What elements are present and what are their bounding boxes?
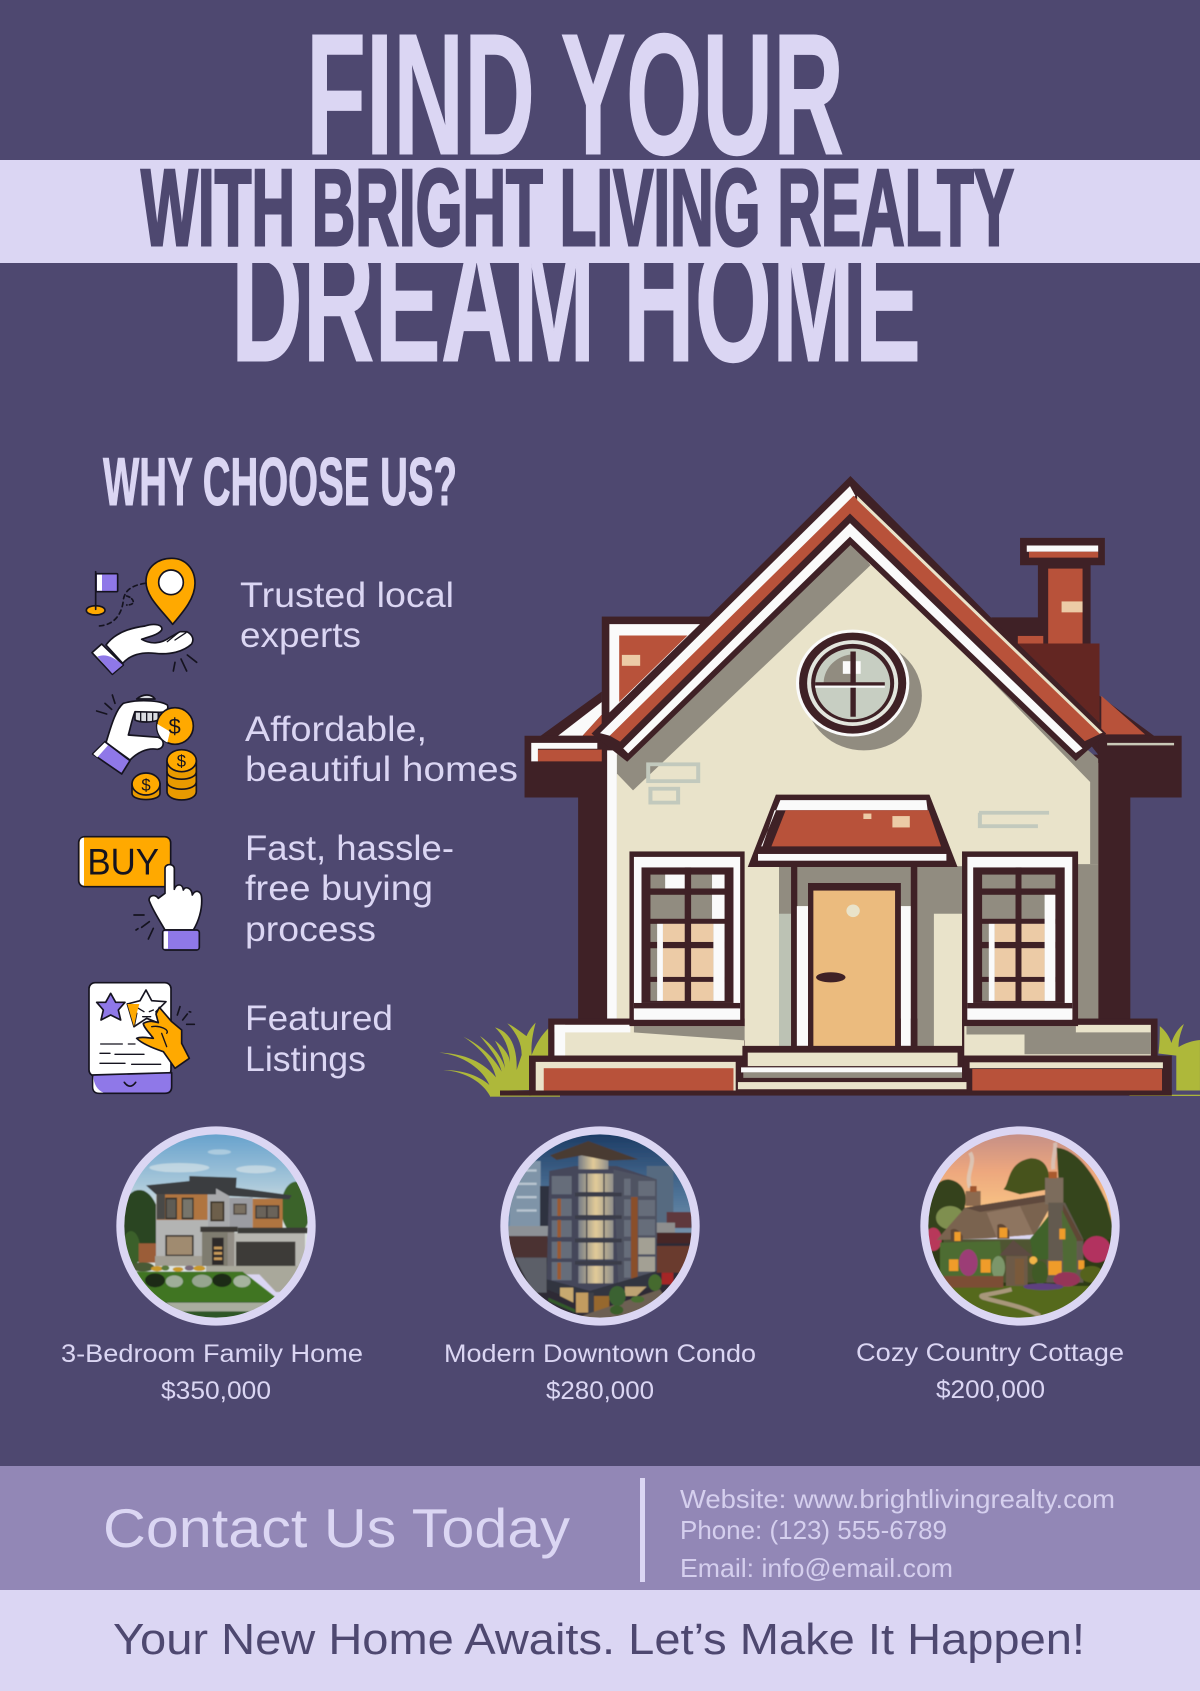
band	[0, 160, 1200, 263]
photo ring: family home	[116, 1126, 316, 1326]
contact details: Email: info@email.com	[680, 1553, 953, 1583]
steps	[737, 1046, 968, 1091]
photo ring: country cottage	[920, 1126, 1120, 1326]
eaves and body	[525, 736, 1182, 1020]
listing: country cottage: Cozy Country Cottage	[856, 1339, 1124, 1367]
benefit: affordable homes: Affordable,	[245, 710, 427, 749]
main roof	[592, 476, 1106, 762]
upper plinth	[548, 1019, 1158, 1061]
benefit: trusted local experts: experts	[240, 616, 361, 655]
listing: family home: $350,000	[161, 1377, 271, 1405]
columns	[791, 866, 797, 1047]
benefit: featured listings: Listings	[245, 1040, 366, 1079]
wall	[607, 750, 617, 1020]
footer tagline: Your New Home Awaits. Let’s Make It Happen!	[113, 1615, 1085, 1664]
door	[808, 883, 901, 1047]
porch side walls	[745, 866, 779, 1047]
benefit: affordable homes	[245, 710, 518, 789]
dormer	[602, 617, 711, 752]
left gable	[538, 691, 602, 755]
chimney	[991, 538, 1154, 755]
benefit: trusted local experts	[240, 576, 454, 655]
icon: buy button with pointer	[79, 837, 202, 950]
house illustration	[500, 476, 1200, 1096]
contact details: Website: www.brightlivingrealty.com	[680, 1484, 1115, 1514]
photo: country cottage	[928, 1134, 1112, 1318]
round window	[796, 630, 922, 750]
porch roof	[748, 795, 958, 867]
benefit: featured listings: Featured	[245, 999, 393, 1038]
listing: family home: 3-Bedroom Family Home	[61, 1340, 363, 1368]
heading: why choose us: WHY CHOOSE US?	[103, 444, 457, 520]
photo ring: downtown condo	[500, 1126, 700, 1326]
icon: hand with coins: $	[141, 775, 151, 794]
listing: downtown condo: Modern Downtown Condo	[444, 1340, 756, 1368]
wall shadows	[617, 540, 871, 790]
ground line	[500, 1091, 531, 1096]
benefit: affordable homes: beautiful homes	[245, 750, 518, 789]
benefit: trusted local experts: Trusted local	[240, 576, 454, 615]
right window	[962, 851, 1078, 1026]
title	[0, 0, 1200, 398]
benefit: fast buying: process	[245, 910, 376, 949]
grass left	[439, 1023, 560, 1097]
footer band	[0, 1590, 1200, 1691]
listing: downtown condo	[444, 1340, 756, 1405]
grass right	[1158, 1024, 1200, 1091]
benefit: fast buying: Fast, hassle-	[245, 829, 454, 868]
icon: buy button with pointer: BUY	[87, 840, 159, 882]
listing: country cottage	[856, 1339, 1124, 1404]
icon: hand with coins: $	[177, 752, 186, 771]
icon: hand with coins: $	[169, 714, 181, 739]
lower plinth	[529, 1056, 1172, 1096]
photo: downtown condo	[508, 1134, 692, 1318]
icon: phone with stars	[89, 983, 194, 1093]
benefit: fast buying	[245, 829, 454, 949]
listing: downtown condo: $280,000	[546, 1377, 654, 1405]
wall brick marks	[648, 764, 1049, 826]
contact band	[0, 1466, 1200, 1590]
listing: family home	[61, 1340, 363, 1405]
contact details	[680, 1484, 1115, 1583]
divider	[640, 1478, 645, 1582]
photo: family home	[124, 1134, 308, 1318]
left window	[629, 851, 745, 1026]
listing: country cottage: $200,000	[936, 1376, 1045, 1404]
contact details: Phone: (123) 555-6789	[680, 1515, 947, 1545]
benefit: fast buying: free buying	[245, 869, 433, 908]
icon: map pin over hand	[86, 558, 197, 674]
benefit: featured listings	[245, 999, 393, 1079]
icon: hand with coins	[93, 695, 196, 800]
contact heading: Contact Us Today	[103, 1497, 571, 1559]
